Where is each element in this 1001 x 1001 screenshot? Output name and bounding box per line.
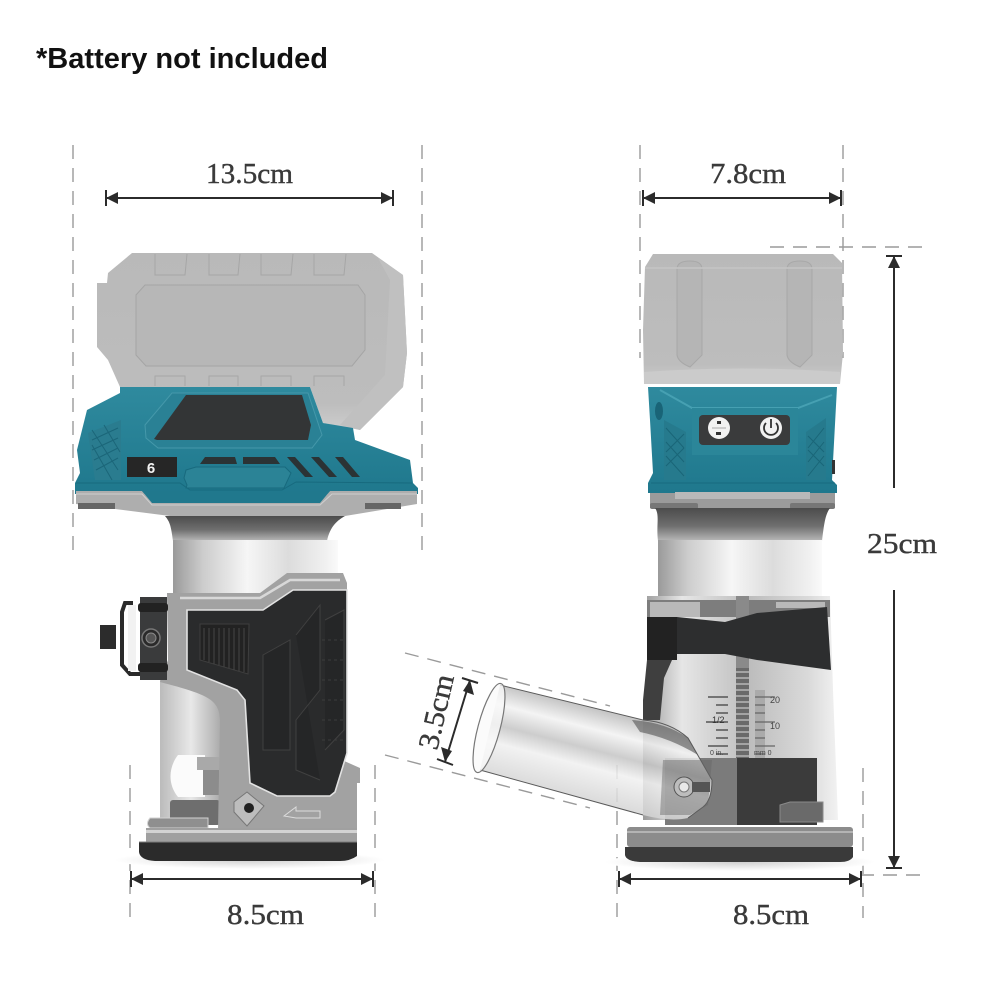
depth scale: 0 in. — [710, 750, 723, 757]
grey upper bands — [647, 600, 830, 617]
mesh grip — [88, 420, 121, 480]
screw and arrow — [234, 792, 320, 826]
floor shadows — [115, 851, 875, 871]
teal motor housing — [75, 387, 418, 494]
base front — [625, 827, 853, 862]
aluminium cylinder — [173, 540, 338, 596]
button: speed — [708, 417, 730, 439]
dimension: 8.5cm right: 8.5cm — [733, 899, 809, 931]
left view: router side — [75, 253, 418, 861]
dimension: 7.8cm: 7.8cm — [710, 158, 786, 190]
button: power — [760, 417, 782, 439]
neck front — [655, 508, 830, 541]
battery side — [97, 253, 407, 430]
silver base plate — [76, 491, 417, 516]
depth scale — [706, 668, 780, 776]
dimension: 8.5cm right — [619, 871, 861, 931]
right view: router front — [466, 254, 853, 862]
black strap — [647, 607, 831, 670]
depth scale: 20 — [770, 695, 780, 705]
battery front — [643, 254, 843, 384]
depth scale: 1/2 — [712, 715, 725, 725]
white window — [170, 755, 205, 797]
vents — [200, 457, 280, 464]
dimension: 3.5cm — [413, 671, 478, 765]
dimension: 8.5cm left: 8.5cm — [227, 899, 304, 931]
speed dial — [127, 457, 177, 477]
depth scale: 10 — [770, 721, 780, 731]
dark window — [154, 395, 311, 440]
dashed guide lines — [73, 145, 922, 918]
dimension: 25cm: 25cm — [867, 528, 937, 560]
title: *Battery not included — [36, 43, 328, 75]
grey frame — [160, 573, 360, 830]
base — [139, 818, 357, 861]
clear housing — [643, 596, 838, 820]
dimension: 13.5cm: 13.5cm — [206, 158, 293, 190]
teal housing front — [648, 387, 837, 493]
button panel — [699, 415, 790, 445]
neck flare — [165, 516, 345, 541]
dark side cavity — [643, 660, 672, 720]
hose elbow roller — [674, 777, 710, 797]
dimension: 3.5cm: 3.5cm — [413, 671, 461, 753]
dimension: 7.8cm — [643, 158, 841, 206]
teal motor housing: 6 — [147, 460, 155, 477]
dimension: 8.5cm left — [131, 871, 373, 931]
dust hose — [466, 681, 712, 819]
cylinder front — [658, 540, 822, 600]
dark lower interior — [665, 758, 817, 825]
collet — [170, 757, 220, 825]
dimension: 13.5cm — [106, 158, 393, 206]
dimension: 25cm — [867, 256, 937, 868]
clamp — [100, 597, 168, 680]
depth scale: mm 0 — [754, 750, 772, 757]
silver strip front — [650, 492, 835, 509]
black grip — [187, 590, 347, 796]
lens housing — [160, 675, 222, 825]
